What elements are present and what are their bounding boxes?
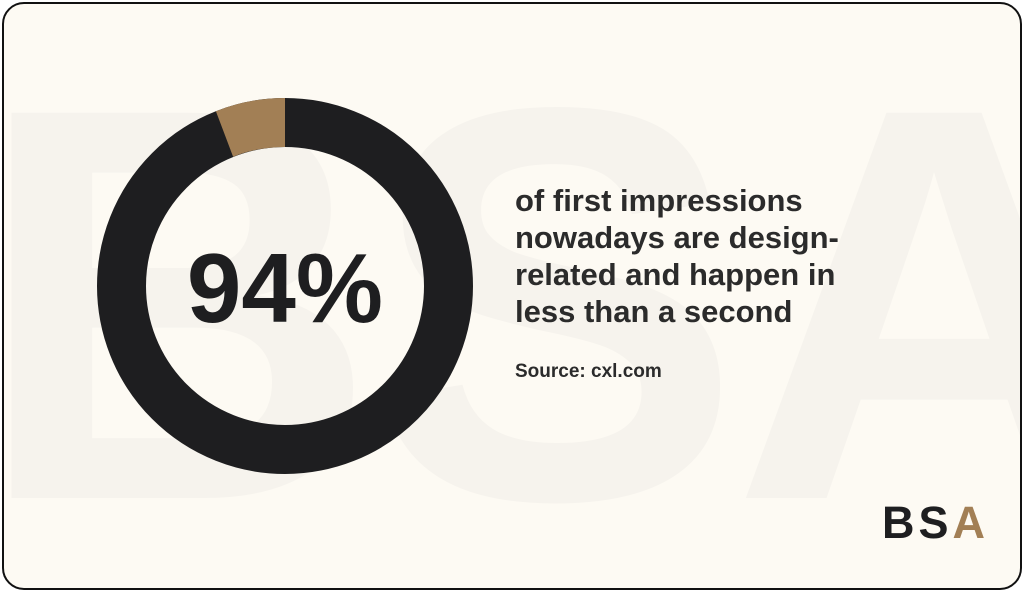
statement text: nowadays are design- — [515, 220, 839, 255]
statement text: related and happen in — [515, 257, 835, 292]
statement text: less than a second — [515, 294, 792, 329]
logo: BSA — [882, 497, 989, 548]
percentage: 94% — [187, 233, 383, 343]
statement text — [515, 183, 839, 329]
statement text: of first impressions — [515, 183, 803, 218]
source: Source: cxl.com — [515, 361, 662, 382]
